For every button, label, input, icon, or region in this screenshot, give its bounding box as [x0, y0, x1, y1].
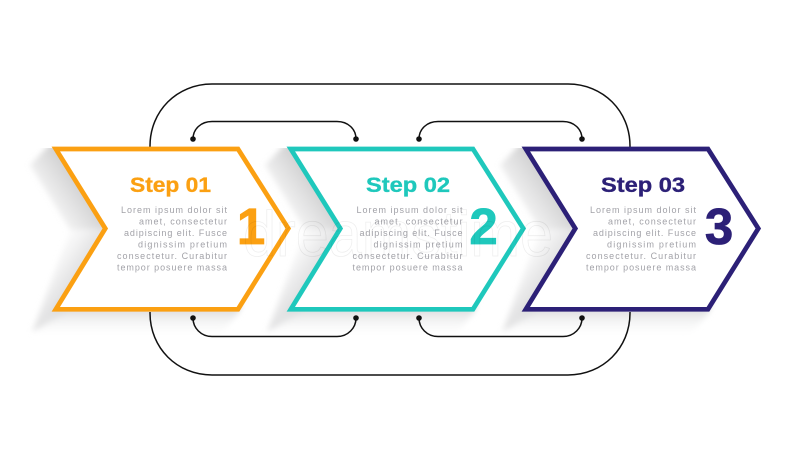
- text block 2: dignissim pretium: [374, 240, 462, 250]
- arrow outline 3: [526, 149, 758, 309]
- heading: step 01: Step 01: [130, 174, 211, 197]
- infographic: [32, 83, 761, 376]
- text block 1: dignissim pretium: [138, 240, 227, 250]
- watermark: dreamstime: [243, 198, 553, 270]
- text block 3: Lorem ipsum dolor sit: [590, 205, 696, 215]
- text block 1: tempor posuere massa: [117, 262, 227, 272]
- bottom connector 2: [416, 315, 585, 336]
- heading: step 03: Step 03: [601, 174, 685, 197]
- text block 3: adipiscing elit. Fusce: [593, 228, 696, 238]
- text block 2: Lorem ipsum dolor sit: [356, 205, 463, 215]
- text block 3: amet, consectetur: [608, 216, 696, 226]
- text block 3: [586, 205, 696, 272]
- text block 2: consectetur. Curabitur: [352, 251, 462, 261]
- panel: step 2: [291, 149, 523, 309]
- number 3: 3: [705, 198, 733, 255]
- panel: step 3: [526, 149, 758, 309]
- text block 1: amet, consectetur: [139, 216, 227, 226]
- top connector 1: [190, 122, 359, 142]
- text block 3: dignissim pretium: [607, 240, 696, 250]
- text block 2: adipiscing elit. Fusce: [360, 228, 462, 238]
- text block 1: adipiscing elit. Fusce: [124, 228, 227, 238]
- outer connector: top: [150, 84, 630, 147]
- text block 2: tempor posuere massa: [352, 262, 462, 272]
- outer connector: bottom: [150, 312, 630, 375]
- text block 1: Lorem ipsum dolor sit: [121, 205, 227, 215]
- text block 3: consectetur. Curabitur: [586, 251, 696, 261]
- panel: step 1: [56, 149, 288, 309]
- heading: step 02: Step 02: [366, 174, 450, 197]
- bottom connector 1: [190, 315, 359, 336]
- text block 2: amet, consectetur: [374, 216, 462, 226]
- text block 1: [117, 205, 227, 272]
- text block 3: tempor posuere massa: [586, 262, 696, 272]
- number 2: 2: [469, 198, 498, 255]
- top connector 2: [416, 122, 585, 142]
- number 1: 1: [237, 198, 265, 255]
- text block 1: consectetur. Curabitur: [117, 251, 227, 261]
- arrow outline 1: [56, 149, 288, 309]
- arrow outline 2: [291, 149, 523, 309]
- arrow shadows: [30, 140, 712, 342]
- text block 2: [352, 205, 463, 272]
